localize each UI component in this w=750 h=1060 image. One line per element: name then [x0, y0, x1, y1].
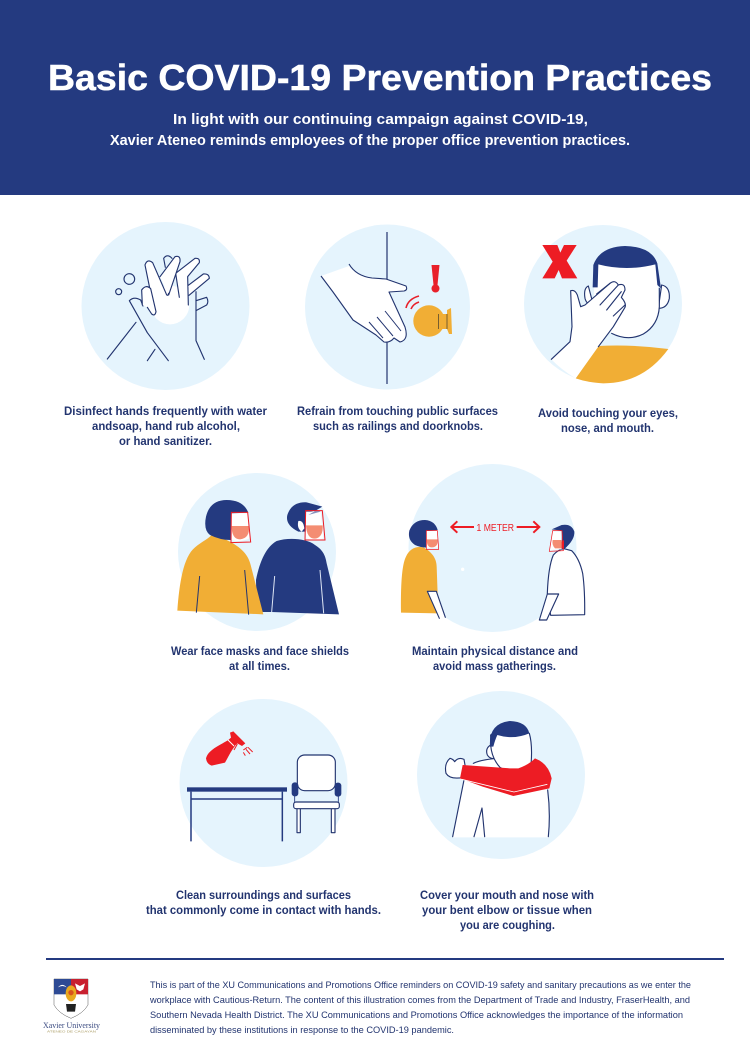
- caption: nose, and mouth.: [561, 423, 654, 435]
- logo: Xavier University crest: Xavier University: [43, 1020, 101, 1030]
- caption: avoid mass gatherings.: [433, 661, 556, 673]
- arrow: left: [451, 521, 474, 533]
- subtitle: In light with our continuing campaign against COVID-19,: [173, 112, 588, 128]
- arrow: right: [517, 521, 539, 533]
- icon: hand on face: [524, 225, 682, 383]
- caption: at all times.: [229, 661, 290, 673]
- caption: [420, 890, 594, 932]
- caption: [146, 890, 381, 917]
- footer note: [149, 979, 691, 1035]
- panel: masks and shields: [171, 473, 349, 673]
- icon: warning mark: [406, 265, 440, 309]
- footer note: workplace with Cautious-Return. The content of this illustration comes from the Department of Trade and Industry, FraserHealth, and: [149, 994, 690, 1005]
- panel: public surfaces: [297, 224, 498, 433]
- logo: Xavier University crest: [43, 979, 101, 1034]
- panel: cover cough: [417, 691, 594, 932]
- caption: [64, 406, 268, 448]
- icon: spray bottle: [206, 731, 253, 766]
- caption: [297, 406, 498, 433]
- footer note: disseminated by these institutions in response to the COVID-19 pandemic.: [150, 1024, 454, 1035]
- icon: washing hands: [82, 222, 250, 390]
- logo: Xavier University crest: ATENEO DE CAGAYAN: [47, 1030, 96, 1034]
- caption: Wear face masks and face shields: [171, 646, 349, 658]
- caption: [538, 408, 678, 435]
- panel: physical distance: [401, 464, 585, 673]
- title: Basic COVID-19 Prevention Practices: [48, 57, 712, 98]
- caption: or hand sanitizer.: [119, 436, 212, 448]
- header band: [0, 0, 750, 195]
- icon: doorknob: [413, 305, 452, 337]
- panel: disinfect hands: [64, 222, 268, 448]
- icon: chair: [292, 755, 341, 833]
- icon: table: [187, 787, 287, 841]
- label: one meter: 1 METER: [476, 522, 514, 534]
- caption: Avoid touching your eyes,: [538, 408, 678, 420]
- caption: Cover your mouth and nose with: [420, 890, 594, 902]
- caption: your bent elbow or tissue when: [422, 905, 592, 917]
- icon: red X: [542, 245, 577, 278]
- caption: Clean surroundings and surfaces: [176, 890, 351, 902]
- caption: that commonly come in contact with hands.: [146, 905, 381, 917]
- footer note: This is part of the XU Communications and Promotions Office reminders on COVID-19 safety and sanitary precautions as we enter the: [150, 979, 691, 990]
- icon: spray, table and chair: [180, 699, 348, 867]
- subtitle: Xavier Ateneo reminds employees of the proper office prevention practices.: [110, 133, 630, 149]
- icon: two people one meter apart: [401, 464, 585, 632]
- caption: Disinfect hands frequently with water: [64, 406, 268, 418]
- icon: two people wearing shields: [177, 473, 339, 631]
- panel: clean surfaces: [146, 699, 381, 917]
- icon: person coughing into elbow: [417, 691, 585, 859]
- caption: you are coughing.: [460, 920, 555, 932]
- caption: such as railings and doorknobs.: [313, 421, 483, 433]
- footer note: Southern Nevada Health District. The XU Communications and Promotions Office acknowledges the importance of the information: [150, 1009, 683, 1020]
- icon: hand and doorknob: [305, 224, 470, 390]
- panel: avoid touching face: [524, 225, 682, 435]
- subtitle: [110, 112, 630, 149]
- caption: [412, 646, 578, 673]
- caption: Maintain physical distance and: [412, 646, 578, 658]
- caption: Refrain from touching public surfaces: [297, 406, 498, 418]
- caption: [171, 646, 349, 673]
- caption: andsoap, hand rub alcohol,: [92, 421, 240, 433]
